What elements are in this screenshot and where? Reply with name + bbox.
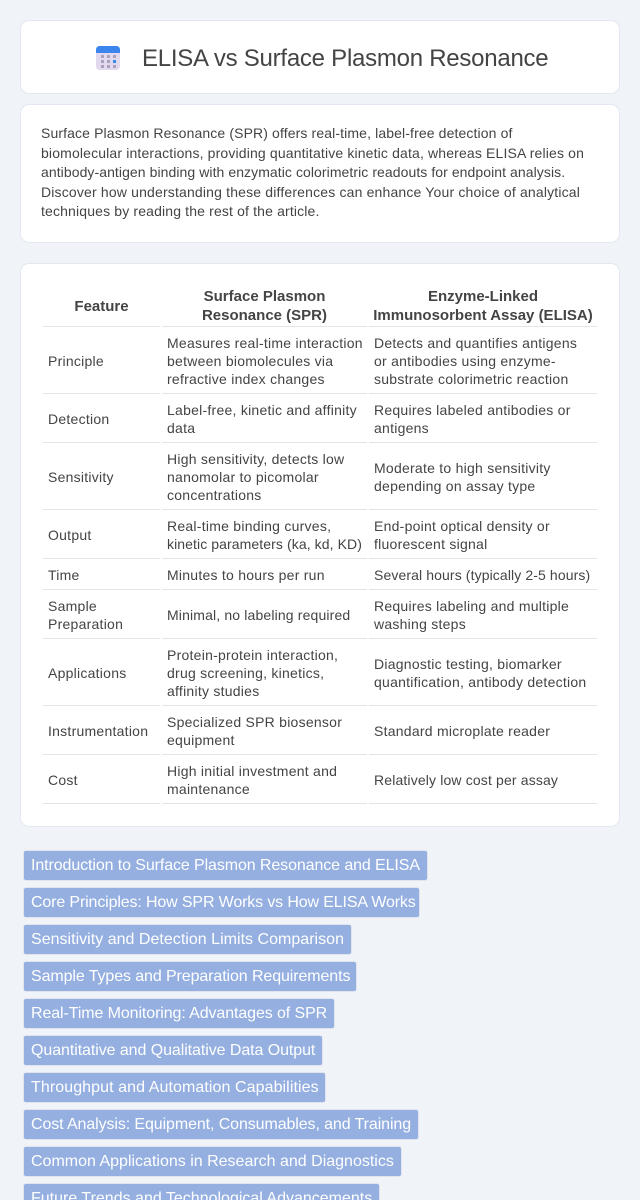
comparison table: substrate colorimetric reaction (374, 371, 568, 387)
comparison table: Immunosorbent Assay (ELISA) (373, 307, 593, 324)
comparison table: refractive index changes (167, 371, 325, 387)
link: future trends (23, 1183, 380, 1200)
link: throughput (23, 1072, 326, 1103)
comparison table: High initial investment and (167, 763, 337, 779)
intro text (41, 125, 584, 219)
comparison table: High sensitivity, detects low (167, 451, 344, 467)
comparison table: Principle (48, 353, 104, 369)
comparison table: Output (48, 527, 92, 543)
link: core principles (23, 887, 420, 918)
comparison table: Diagnostic testing, biomarker (374, 656, 562, 672)
comparison table: nanomolar to picomolar (167, 469, 319, 485)
comparison table: depending on assay type (374, 478, 535, 494)
table card (20, 263, 620, 827)
link: sample types: Sample Types and Preparation Requirements (31, 968, 350, 985)
comparison table: Measures real-time interaction (167, 335, 363, 351)
link: sensitivity: Sensitivity and Detection Limits Comparison (31, 931, 344, 948)
comparison table: Preparation (48, 616, 123, 632)
comparison table: Cost (48, 772, 78, 788)
intro text: Surface Plasmon Resonance (SPR) offers real-time, label-free detection of (41, 125, 512, 141)
comparison table: Sample (48, 598, 97, 614)
comparison table: Label-free, kinetic and affinity (167, 402, 357, 418)
comparison table: Applications (48, 665, 126, 681)
link: real-time monitoring (23, 998, 335, 1029)
comparison table: Minutes to hours per run (167, 567, 325, 583)
comparison table: Protein-protein interaction, (167, 647, 338, 663)
comparison table: Requires labeling and multiple (374, 598, 569, 614)
comparison table: Requires labeled antibodies or (374, 402, 571, 418)
comparison table: End-point optical density or (374, 518, 550, 534)
comparison table: Several hours (typically 2-5 hours) (374, 567, 590, 583)
icon: calendar (96, 46, 120, 70)
comparison table: Feature (74, 298, 129, 314)
comparison table: affinity studies (167, 683, 259, 699)
intro text: Discover how understanding these differences can enhance Your choice of analytical (41, 184, 580, 200)
comparison table: Resonance (SPR) (202, 307, 327, 324)
link: throughput: Throughput and Automation Capabilities (31, 1079, 319, 1096)
link: data output (23, 1035, 323, 1066)
comparison table: Specialized SPR biosensor (167, 714, 342, 730)
link: introduction (23, 850, 428, 881)
intro text: biomolecular interactions, providing quantitative kinetic data, whereas ELISA relies on (41, 144, 584, 160)
comparison table: Standard microplate reader (374, 723, 550, 739)
link: core principles: Core Principles: How SPR Works vs How ELISA Works (31, 894, 416, 911)
link: real-time monitoring: Real-Time Monitoring: Advantages of SPR (31, 1005, 327, 1022)
intro card (20, 104, 620, 243)
comparison table: or antibodies using enzyme- (374, 353, 556, 369)
comparison table: equipment (167, 732, 235, 748)
link: applications: Common Applications in Research and Diagnostics (31, 1153, 394, 1170)
intro text: techniques by reading the rest of the article. (41, 203, 320, 219)
comparison table: kinetic parameters (ka, kd, KD) (167, 536, 362, 552)
link: cost analysis (23, 1109, 419, 1140)
comparison table: Time (48, 567, 80, 583)
header card (20, 20, 620, 94)
comparison table: Relatively low cost per assay (374, 772, 558, 788)
link: data output: Quantitative and Qualitative Data Output (31, 1042, 315, 1059)
comparison table: washing steps (374, 616, 466, 632)
link: sensitivity (23, 924, 352, 955)
comparison table: quantification, antibody detection (374, 674, 586, 690)
comparison table: Instrumentation (48, 723, 148, 739)
comparison table: Moderate to high sensitivity (374, 460, 551, 476)
comparison table: Minimal, no labeling required (167, 607, 350, 623)
link: applications (23, 1146, 402, 1177)
comparison table: between biomolecules via (167, 353, 333, 369)
comparison table: data (167, 420, 195, 436)
comparison table: Real-time binding curves, (167, 518, 331, 534)
link: cost analysis: Cost Analysis: Equipment, Consumables, and Training (31, 1116, 411, 1133)
title: ELISA vs Surface Plasmon Resonance (142, 45, 548, 72)
comparison table: fluorescent signal (374, 536, 487, 552)
comparison table: antigens (374, 420, 429, 436)
intro text: antibody-antigen binding with enzymatic colorimetric readouts for endpoint analysis. (41, 164, 565, 180)
link: sample types (23, 961, 357, 992)
comparison table: Sensitivity (48, 469, 114, 485)
link: introduction: Introduction to Surface Plasmon Resonance and ELISA (31, 857, 420, 874)
comparison table (43, 288, 597, 804)
comparison table: Detection (48, 411, 109, 427)
comparison table: maintenance (167, 781, 250, 797)
comparison table: concentrations (167, 487, 262, 503)
comparison table: Enzyme-Linked (428, 288, 538, 305)
comparison table: Detects and quantifies antigens (374, 335, 577, 351)
comparison table: drug screening, kinetics, (167, 665, 324, 681)
comparison table: Surface Plasmon (204, 288, 325, 305)
